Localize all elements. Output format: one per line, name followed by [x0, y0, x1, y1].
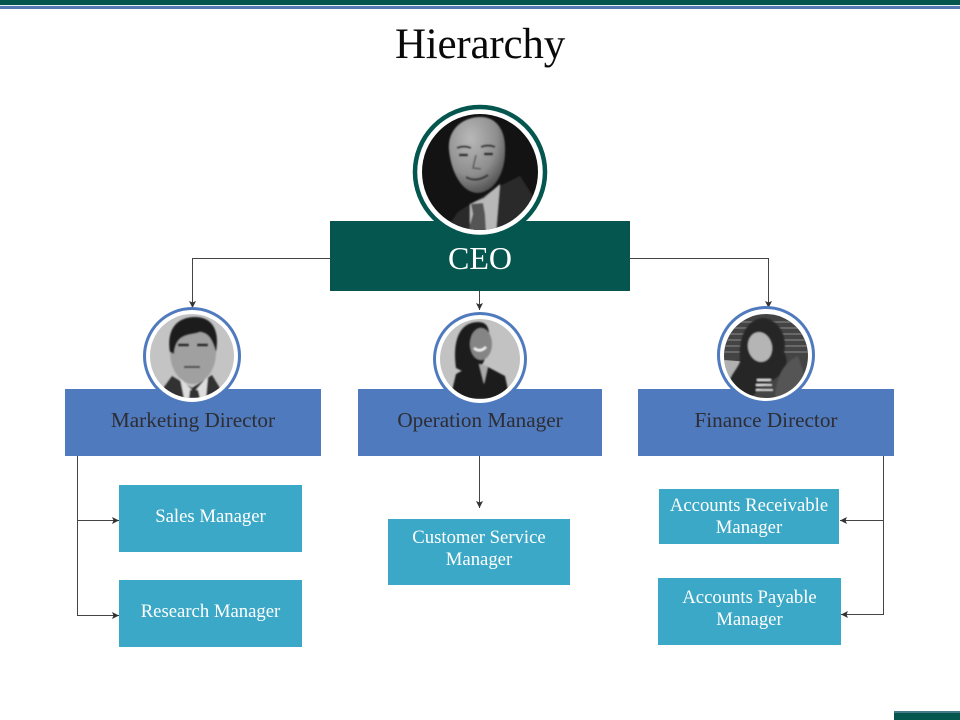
- icon: Finance Director portrait: [718, 308, 814, 402]
- Customer Service Manager box: Manager: [446, 549, 512, 570]
- Marketing Director box: [65, 389, 321, 456]
- Accounts Payable Manager box: Accounts Payable: [682, 586, 817, 608]
- Operation Manager box: [358, 389, 602, 456]
- Accounts Receivable Manager box: [659, 489, 839, 544]
- portraits: [143, 104, 815, 403]
- Marketing Director box: Marketing Director: [111, 408, 275, 432]
- CEO box: CEO: [448, 240, 512, 276]
- Research Manager box: [119, 580, 302, 647]
- Finance Director box: [638, 389, 894, 456]
- Customer Service Manager box: [388, 519, 570, 585]
- Operation Manager box: Operation Manager: [397, 408, 563, 432]
- Accounts Receivable Manager box: Accounts Receivable: [670, 494, 828, 516]
- title: Hierarchy: [395, 21, 565, 68]
- Finance Director box: Finance Director: [695, 408, 837, 432]
- footer accent tab: [894, 711, 960, 720]
- Research Manager box: Research Manager: [141, 600, 280, 622]
- Sales Manager box: [119, 485, 302, 552]
- Accounts Payable Manager box: [658, 578, 841, 645]
- Accounts Receivable Manager box: Manager: [716, 516, 782, 538]
- Accounts Payable Manager box: Manager: [716, 608, 783, 630]
- Customer Service Manager box: Customer Service: [412, 527, 546, 548]
- icon: Operation Manager portrait: [434, 314, 526, 404]
- Sales Manager box: Sales Manager: [155, 506, 266, 526]
- top header band: [0, 0, 960, 9]
- icon: CEO portrait: [415, 107, 545, 237]
- icon: Marketing Director portrait: [144, 308, 240, 404]
- CEO box: [330, 221, 630, 291]
